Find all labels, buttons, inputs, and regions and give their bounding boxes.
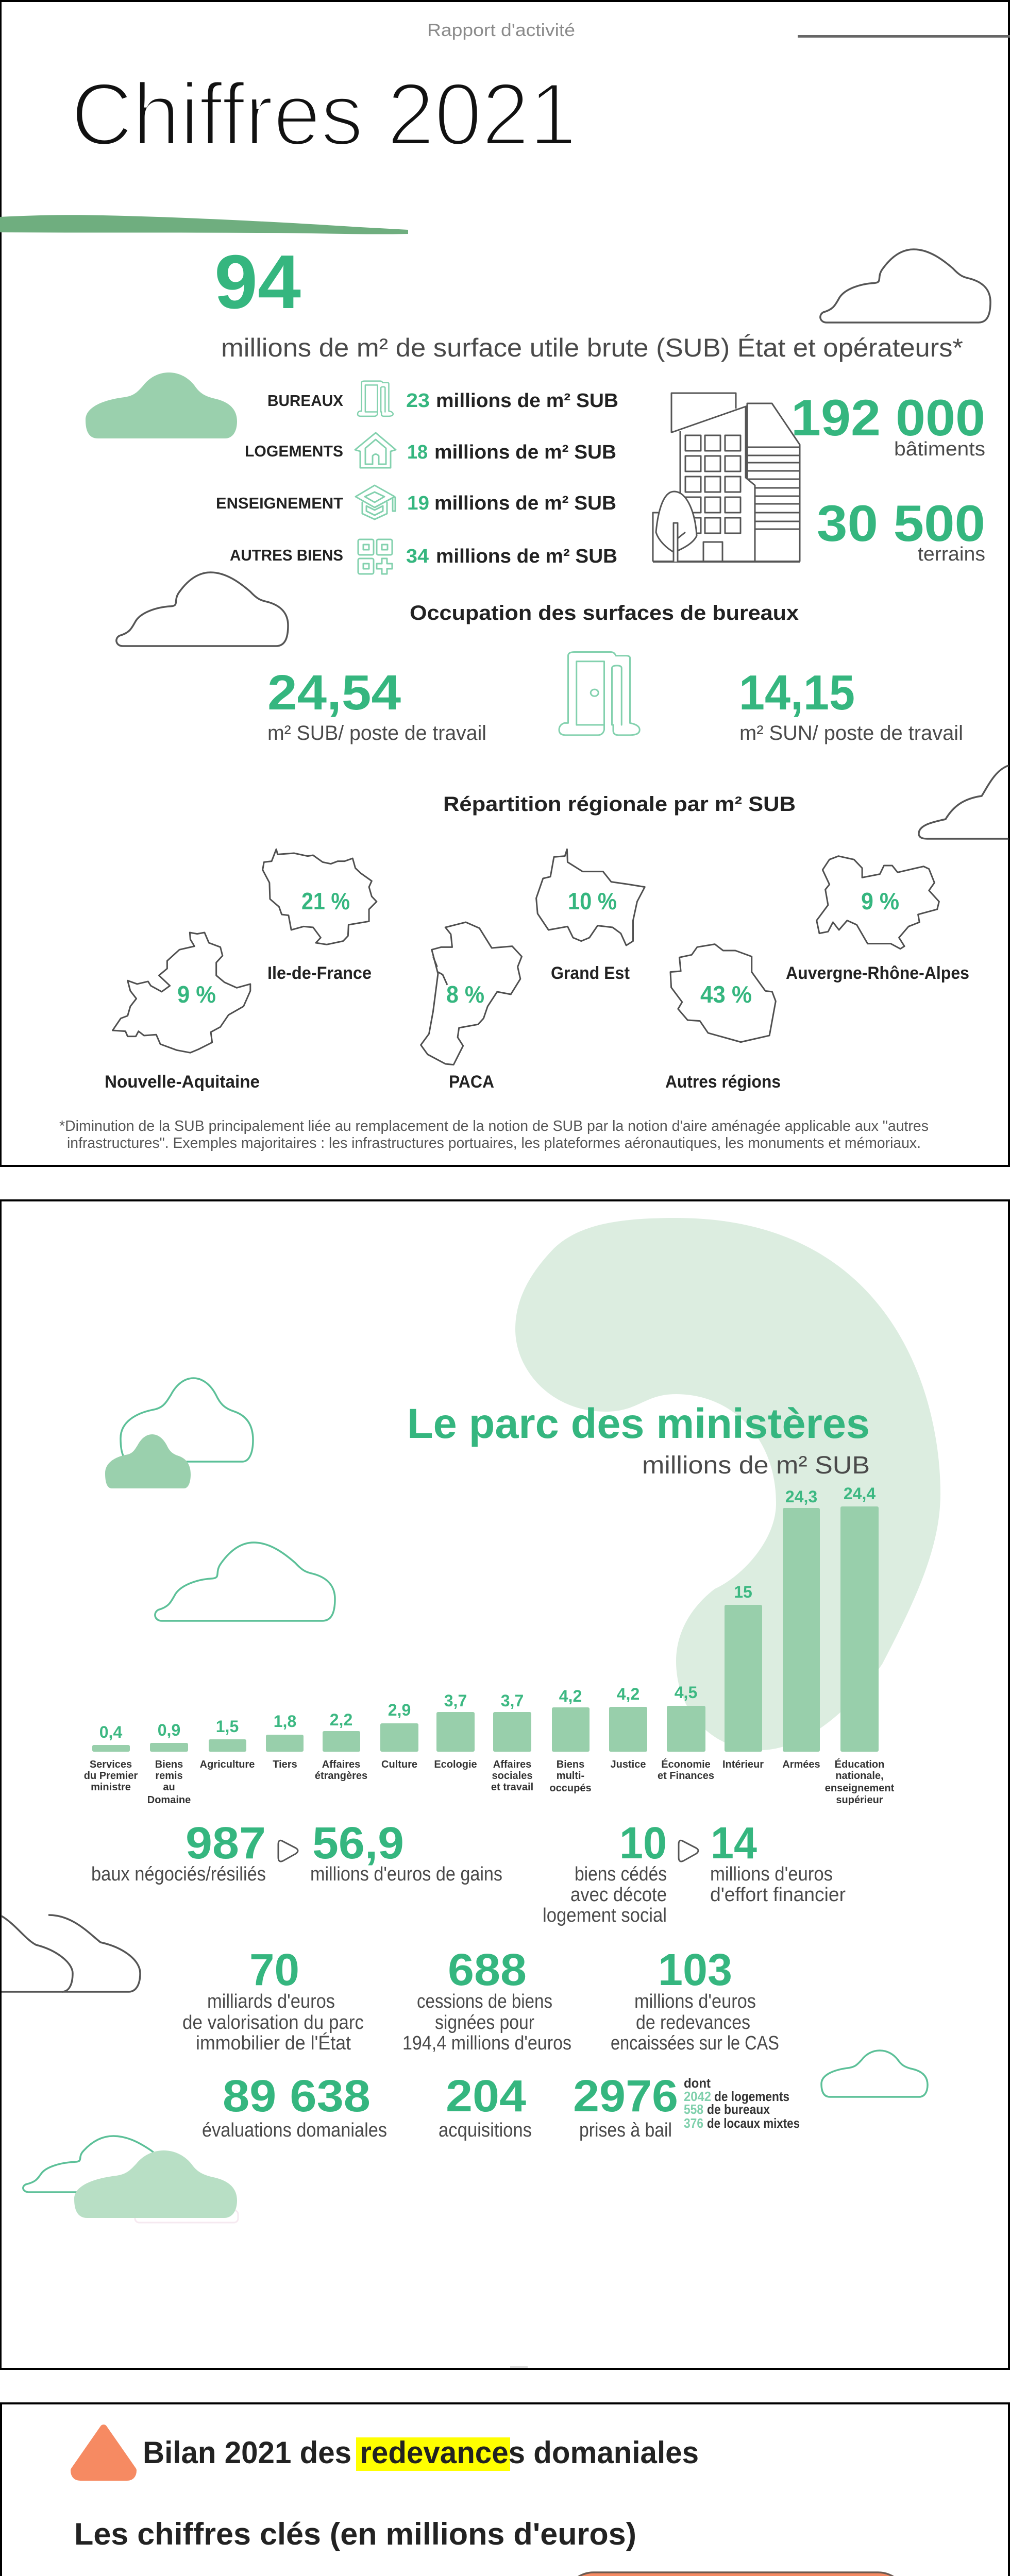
row: autres biens: AUTRES BIENS xyxy=(230,546,343,564)
region: Autres régions: 43 % xyxy=(700,981,752,1008)
row: bureaux: 23 xyxy=(406,390,430,412)
region: PACA xyxy=(421,922,521,1092)
faint pink outline under cloud xyxy=(135,2210,238,2223)
cloud: outline green bottom left xyxy=(23,2136,188,2192)
bars xyxy=(92,1506,879,1752)
stat: 14,15: 14,15 xyxy=(739,665,855,720)
bar labels: Biens xyxy=(557,1759,584,1770)
stat: 56,9 gains: 56,9 xyxy=(312,1818,404,1868)
bar values: 0,9 xyxy=(158,1721,180,1739)
icon: orange triangle xyxy=(74,2428,133,2477)
stat: 89 638 évaluations: évaluations domaniales xyxy=(202,2120,387,2141)
footnote: *Diminution de la SUB principalement liée au remplacement de la notion de SUB par la notion d'aire aménagée applicable aux "autres xyxy=(59,1118,929,1134)
bar values: 1,8 xyxy=(274,1712,296,1731)
breakdown of leases: 376 xyxy=(684,2115,703,2131)
bar values: 3,7 xyxy=(501,1691,524,1710)
row: enseignement xyxy=(216,485,616,519)
bar labels: Affaires xyxy=(493,1759,531,1770)
bar values: 4,2 xyxy=(559,1687,582,1705)
stat: 10 biens cédés: biens cédés xyxy=(575,1863,667,1885)
bar values: 2,9 xyxy=(388,1701,411,1719)
cloud: outline clipped right xyxy=(919,766,1008,839)
bar labels: Culture xyxy=(381,1759,417,1770)
stat: 14 effort financier: 14 xyxy=(711,1818,757,1868)
stat: 987 baux xyxy=(91,1818,266,1885)
row: autres biens: 34 xyxy=(406,546,429,567)
panel: le parc des ministères xyxy=(1,1200,1009,2369)
bar labels: étrangères xyxy=(315,1770,367,1782)
stat: 14 effort financier: millions d'euros xyxy=(710,1863,833,1885)
row: logements: 18 xyxy=(407,442,428,463)
region: Grand Est: 10 % xyxy=(568,888,617,914)
region: Autres régions: Autres régions xyxy=(665,1072,781,1092)
stat: 688 cessions: 688 xyxy=(448,1945,527,1995)
region: Ile-de-France: 21 % xyxy=(301,888,350,914)
stat: 103 redevances xyxy=(611,1945,779,2054)
stat: 688 cessions xyxy=(402,1945,571,2054)
region: PACA: PACA xyxy=(449,1072,494,1092)
row: logements xyxy=(245,433,616,468)
bar labels: Biens xyxy=(155,1759,183,1770)
stat: 204 acquisitions: 204 xyxy=(446,2071,526,2121)
heading: occupation: Occupation des surfaces de bureaux xyxy=(410,602,799,624)
bar labels: Tiers xyxy=(273,1759,297,1770)
bar values: 2,2 xyxy=(330,1710,352,1729)
region: Nouvelle-Aquitaine xyxy=(105,933,260,1092)
title: Chiffres 2021 xyxy=(71,65,577,164)
background blob xyxy=(515,1218,940,1750)
region: Nouvelle-Aquitaine: Nouvelle-Aquitaine xyxy=(105,1072,260,1092)
stat: 56,9 gains xyxy=(310,1818,502,1885)
region: Grand Est xyxy=(536,849,645,983)
stat: 10 biens cédés xyxy=(543,1818,667,1926)
stat: 70 milliards: milliards d'euros xyxy=(207,1991,335,2012)
stat: 103 redevances: de redevances xyxy=(636,2012,750,2033)
icon: door xyxy=(358,381,393,416)
breakdown of leases: 2042 xyxy=(684,2089,711,2104)
breakdown of leases: dont xyxy=(684,2075,711,2091)
stat: 192 000 bâtiments: 192 000 xyxy=(791,389,985,446)
bar labels: et Finances xyxy=(658,1770,714,1782)
bar labels: Affaires xyxy=(322,1759,360,1770)
bar labels: Éducation xyxy=(835,1758,884,1770)
stat: 14 effort financier: d'effort financier xyxy=(710,1884,846,1906)
title: Bilan 2021 des redevances domaniales xyxy=(143,2435,699,2470)
region: Autres régions xyxy=(665,944,781,1092)
cloud: outline green lower xyxy=(155,1543,335,1621)
bar labels: Intérieur xyxy=(722,1759,764,1770)
bar values xyxy=(99,1484,876,1741)
bar labels: Armées xyxy=(782,1759,820,1770)
stat: 56,9 gains: millions d'euros de gains xyxy=(310,1863,502,1885)
bar labels: Domaine xyxy=(147,1794,191,1806)
stat: 987 baux: 987 xyxy=(186,1818,266,1868)
icon: graduation cap xyxy=(356,485,395,519)
callout: 103,2 xyxy=(564,2572,908,2576)
stat: 14,15: m² SUN/ poste de travail xyxy=(739,722,963,744)
stat: 24,54: 24,54 xyxy=(267,665,401,720)
total surface caption: millions de m² de surface utile brute (SUB) État et opérateurs* xyxy=(221,333,963,362)
header: rapport d'activité: Rapport d'activité xyxy=(427,21,575,40)
bar values: 24,3 xyxy=(785,1487,817,1506)
stat: 204 acquisitions xyxy=(439,2071,532,2141)
arrow: play outline 1 xyxy=(278,1840,298,1861)
heading: répartition: Répartition régionale par m² SUB xyxy=(443,793,796,816)
arrow: play outline 2 xyxy=(679,1840,698,1861)
faint page number remnant xyxy=(510,2366,528,2368)
region: Grand Est: Grand Est xyxy=(551,963,630,983)
bar labels: supérieur xyxy=(836,1794,883,1806)
row: bureaux xyxy=(267,381,618,416)
bar labels: et travail xyxy=(491,1782,533,1793)
region: Auvergne-Rhône-Alpes xyxy=(786,856,969,983)
clouds: clipped outlines left xyxy=(2,1915,140,1992)
stat: 24,54: m² SUB/ poste de travail xyxy=(267,722,486,744)
bar values: 4,5 xyxy=(675,1683,697,1702)
panel: chiffres 2021 xyxy=(0,1,1010,1166)
breakdown of leases: de bureaux xyxy=(707,2102,770,2117)
row: bureaux: BUREAUX xyxy=(267,392,343,410)
row: logements: LOGEMENTS xyxy=(245,442,343,460)
bar labels: Ecologie xyxy=(434,1759,477,1770)
bar labels: enseignement xyxy=(825,1783,895,1794)
icon: grid xyxy=(358,539,392,574)
bar values: 4,2 xyxy=(617,1685,639,1703)
icon: building with tree xyxy=(653,393,800,562)
footnote xyxy=(59,1118,929,1151)
row: autres biens xyxy=(230,539,617,574)
stat: 70 milliards xyxy=(182,1945,364,2054)
bar labels: multi- xyxy=(557,1770,584,1782)
stat: 688 cessions: signées pour xyxy=(435,2012,534,2033)
breakdown of leases: 558 xyxy=(684,2102,703,2117)
total surface: 94: 94 xyxy=(214,240,301,325)
region: Nouvelle-Aquitaine: 9 % xyxy=(177,981,216,1008)
bar values: 15 xyxy=(734,1583,752,1601)
bar labels: du Premier xyxy=(84,1770,138,1782)
stat: 10 biens cédés: avec décote xyxy=(570,1884,667,1906)
stat: 30 500 terrains: 30 500 xyxy=(817,495,985,552)
bar labels xyxy=(84,1758,895,1806)
panel: bilan des redevances xyxy=(1,2403,1009,2576)
region: Auvergne-Rhône-Alpes: Auvergne-Rhône-Alpes xyxy=(786,963,969,983)
stat: 688 cessions: cessions de biens xyxy=(417,1991,552,2012)
title: Le parc des ministères xyxy=(407,1400,870,1447)
row: autres biens: millions de m² SUB xyxy=(436,546,617,567)
row: enseignement: ENSEIGNEMENT xyxy=(216,494,343,512)
subtitle: Les chiffres clés (en millions d'euros) xyxy=(74,2517,636,2551)
stat: 70 milliards: immobilier de l'État xyxy=(196,2032,351,2054)
stat: 14 effort financier xyxy=(710,1818,846,1906)
stat: 103 redevances: 103 xyxy=(658,1945,732,1995)
stat: 2976 prises à bail: prises à bail xyxy=(579,2120,672,2141)
footnote: infrastructures". Exemples majoritaires : les infrastructures portuaires, les plateformes aéronautiques, les monuments et mémoriaux. xyxy=(67,1135,921,1151)
bar labels: au xyxy=(163,1782,175,1793)
row: enseignement: millions de m² SUB xyxy=(434,493,616,514)
stat: 103 redevances: millions d'euros xyxy=(634,1991,756,2012)
stat: 10 biens cédés: 10 xyxy=(619,1818,667,1868)
breakdown of leases xyxy=(684,2075,800,2131)
cloud: outline green upper xyxy=(121,1378,253,1462)
icon: door large xyxy=(559,652,639,735)
cloud: filled green xyxy=(105,1434,191,1488)
stat: 103 redevances: encaissées sur le CAS xyxy=(611,2032,779,2054)
stat: 192 000 bâtiments: bâtiments xyxy=(894,438,985,460)
bar chart xyxy=(84,1484,895,1806)
bar labels: Services xyxy=(90,1759,132,1770)
bar labels: Justice xyxy=(611,1759,646,1770)
stat: 70 milliards: de valorisation du parc xyxy=(182,2012,364,2033)
bar values: 3,7 xyxy=(444,1691,467,1710)
stat: 24,54 xyxy=(267,665,486,744)
header rule xyxy=(798,35,1010,38)
cloud: outline top right xyxy=(820,249,990,323)
bar labels: remis xyxy=(155,1770,183,1782)
stat: 89 638 évaluations: 89 638 xyxy=(223,2071,371,2121)
stat: 2976 prises à bail xyxy=(573,2071,800,2141)
bar values: 1,5 xyxy=(216,1717,239,1736)
bar labels: occupés xyxy=(549,1783,592,1794)
cloud: filled pale green xyxy=(74,2150,237,2218)
stat: 2976 prises à bail: 2976 xyxy=(573,2071,678,2121)
stat: 14,15 xyxy=(739,665,963,744)
bar labels: Agriculture xyxy=(200,1759,255,1770)
row: bureaux: millions de m² SUB xyxy=(436,390,618,412)
region: Auvergne-Rhône-Alpes: 9 % xyxy=(861,888,899,914)
cloud: filled left xyxy=(86,372,237,438)
stat: 204 acquisitions: acquisitions xyxy=(439,2120,532,2141)
cloud: outline mid left xyxy=(116,572,288,646)
bar labels: sociales xyxy=(492,1770,532,1782)
stat: 987 baux: baux négociés/résiliés xyxy=(91,1863,266,1885)
breakdown of leases: de logements xyxy=(714,2089,789,2104)
bar labels: Économie xyxy=(661,1758,711,1770)
bar labels: nationale, xyxy=(835,1770,884,1782)
stat: 89 638 évaluations xyxy=(202,2071,387,2141)
cloud: outline green right xyxy=(821,2050,928,2097)
stat: 688 cessions: 194,4 millions d'euros xyxy=(402,2032,571,2054)
stat: 10 biens cédés: logement social xyxy=(543,1905,667,1926)
icon: house xyxy=(355,433,396,468)
bar values: 0,4 xyxy=(99,1723,122,1741)
green brush stroke xyxy=(0,215,408,234)
stat: 70 milliards: 70 xyxy=(249,1945,299,1995)
bar values: 24,4 xyxy=(844,1484,876,1503)
bar labels: ministre xyxy=(91,1782,131,1793)
region: Ile-de-France xyxy=(263,849,377,983)
subtitle: millions de m² SUB xyxy=(642,1452,870,1479)
row: logements: millions de m² SUB xyxy=(434,442,616,463)
region: PACA: 8 % xyxy=(446,981,484,1008)
breakdown of leases: de locaux mixtes xyxy=(707,2115,800,2131)
stat: 30 500 terrains: terrains xyxy=(918,544,985,565)
row: enseignement: 19 xyxy=(407,493,429,514)
region: Ile-de-France: Ile-de-France xyxy=(267,963,372,983)
